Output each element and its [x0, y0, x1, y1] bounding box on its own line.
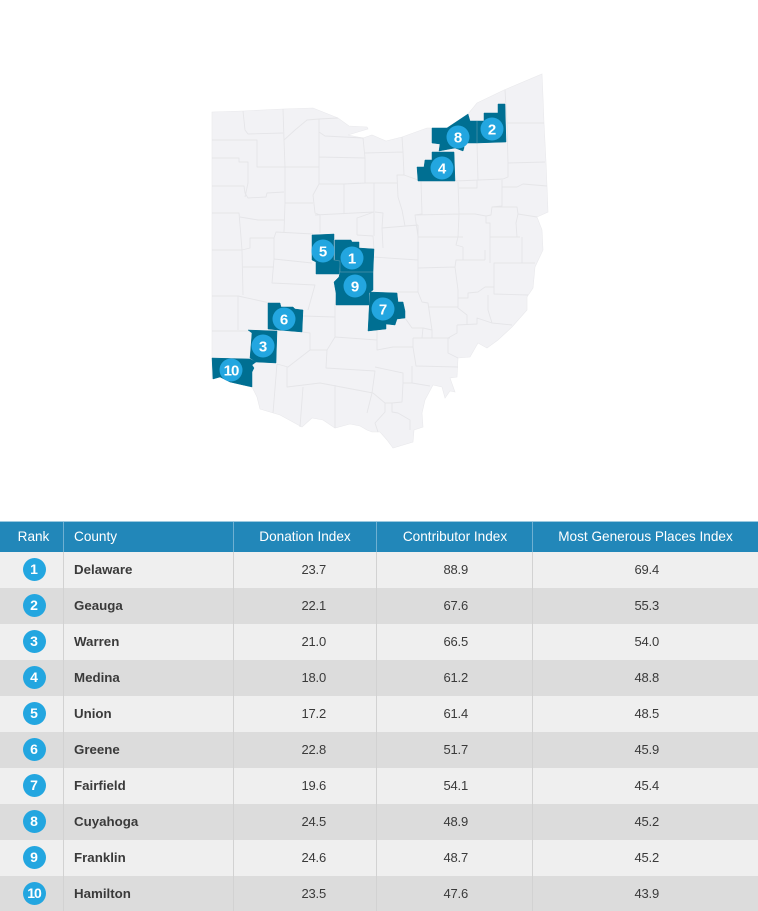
- county: Greene: [268, 303, 303, 332]
- badge 10: [220, 358, 242, 382]
- row: Fairfield: Fairfield: [74, 778, 126, 793]
- row: Cuyahoga: 45.2: [634, 814, 659, 829]
- row: Union: Union: [74, 706, 112, 721]
- row: Cuyahoga: 24.5: [301, 814, 326, 829]
- row: Franklin: [0, 840, 758, 876]
- row: Union: 61.4: [443, 706, 468, 721]
- table header: Rank: [18, 529, 49, 544]
- badge 9: 9: [351, 278, 359, 296]
- table header: [0, 521, 758, 552]
- row: Fairfield: 7: [30, 777, 38, 793]
- badge 8: [446, 126, 470, 148]
- badge 5: [312, 240, 334, 262]
- row: Geauga: [0, 588, 758, 624]
- highlighted counties: [212, 104, 506, 387]
- row: Franklin: 48.7: [443, 850, 468, 865]
- row: Union: [0, 696, 758, 732]
- badge 8: 8: [454, 130, 462, 146]
- table header: County: [74, 529, 117, 544]
- state outline: [212, 74, 548, 448]
- badge 10: 10: [224, 362, 239, 380]
- row: Union: 48.5: [634, 706, 659, 721]
- row: Union: 17.2: [301, 706, 326, 721]
- county: Medina: [417, 152, 455, 181]
- row: Greene: 45.9: [634, 742, 659, 757]
- row: Delaware: 69.4: [634, 562, 659, 577]
- table header: Contributor Index: [403, 529, 507, 544]
- row: Cuyahoga: 8: [30, 813, 38, 829]
- row: Warren: Warren: [74, 634, 119, 649]
- row: Cuyahoga: [0, 804, 758, 840]
- county boundaries: [212, 90, 547, 432]
- row: Franklin: 24.6: [301, 850, 326, 865]
- row: Cuyahoga: 48.9: [443, 814, 468, 829]
- row: Greene: Greene: [74, 742, 120, 757]
- row: Hamilton: 47.6: [443, 886, 468, 901]
- badge 5: 5: [319, 244, 327, 260]
- row: Geauga: Geauga: [74, 598, 123, 613]
- county: Hamilton: [212, 358, 256, 387]
- row: Delaware: 1: [30, 561, 38, 577]
- badge 3: [252, 334, 274, 358]
- county: Geauga: [477, 104, 506, 143]
- row: Medina: 48.8: [634, 670, 659, 685]
- badge 9: [344, 274, 366, 298]
- row: Union: 5: [30, 705, 38, 721]
- row: Fairfield: 19.6: [301, 778, 326, 793]
- row: Geauga: 2: [30, 597, 38, 613]
- badge 1: [340, 246, 364, 270]
- row: Delaware: [0, 552, 758, 588]
- badge 7: [372, 298, 394, 320]
- row: Hamilton: [0, 876, 758, 911]
- table header: Donation Index: [259, 529, 351, 544]
- row: Delaware: 23.7: [301, 562, 326, 577]
- badge 3: 3: [259, 338, 267, 356]
- row: Medina: Medina: [74, 670, 120, 685]
- row: Warren: 54.0: [634, 634, 659, 649]
- table header: Most Generous Places Index: [558, 529, 733, 544]
- row: Franklin: Franklin: [74, 850, 126, 865]
- badge 2: [480, 118, 504, 140]
- county: Franklin: [334, 272, 373, 305]
- county: Cuyahoga: [432, 114, 477, 151]
- table: [0, 521, 758, 911]
- row: Medina: 4: [30, 669, 38, 685]
- row: Hamilton: 23.5: [301, 886, 326, 901]
- row: Delaware: 88.9: [443, 562, 468, 577]
- badge 1: 1: [348, 250, 356, 268]
- county: Warren: [248, 330, 277, 363]
- row: Greene: 51.7: [443, 742, 468, 757]
- row: Warren: 3: [30, 633, 38, 649]
- row: Greene: 22.8: [301, 742, 326, 757]
- row: Greene: [0, 732, 758, 768]
- row: Geauga: 22.1: [301, 598, 326, 613]
- row: Fairfield: [0, 768, 758, 804]
- row: Medina: 18.0: [301, 670, 326, 685]
- row: Warren: 66.5: [443, 634, 468, 649]
- row: Hamilton: 43.9: [634, 886, 659, 901]
- row: Geauga: 67.6: [443, 598, 468, 613]
- badge 4: 4: [438, 160, 447, 178]
- row: Cuyahoga: Cuyahoga: [74, 814, 138, 829]
- row: Geauga: 55.3: [634, 598, 659, 613]
- badge 2: 2: [488, 122, 496, 138]
- row: Medina: [0, 660, 758, 696]
- badge 6: 6: [280, 312, 288, 328]
- row: Fairfield: 54.1: [443, 778, 468, 793]
- row: Medina: 61.2: [443, 670, 468, 685]
- county: Fairfield: [368, 292, 405, 331]
- row: Franklin: 45.2: [634, 850, 659, 865]
- map of Ohio: [212, 74, 548, 448]
- row: Delaware: Delaware: [74, 562, 132, 577]
- county dividers: [334, 121, 477, 272]
- county: Delaware: [335, 240, 374, 272]
- row: Warren: 21.0: [301, 634, 326, 649]
- row: Fairfield: 45.4: [634, 778, 659, 793]
- row: Warren: [0, 624, 758, 660]
- row: Greene: 6: [30, 741, 38, 757]
- row: Hamilton: Hamilton: [74, 886, 131, 901]
- badge 6: [272, 308, 296, 330]
- county: Union: [312, 234, 340, 274]
- row: Hamilton: 10: [27, 885, 41, 901]
- badge 7: 7: [379, 302, 387, 318]
- row: Franklin: 9: [30, 849, 38, 865]
- badge 4: [430, 156, 454, 180]
- map badges: [220, 118, 504, 382]
